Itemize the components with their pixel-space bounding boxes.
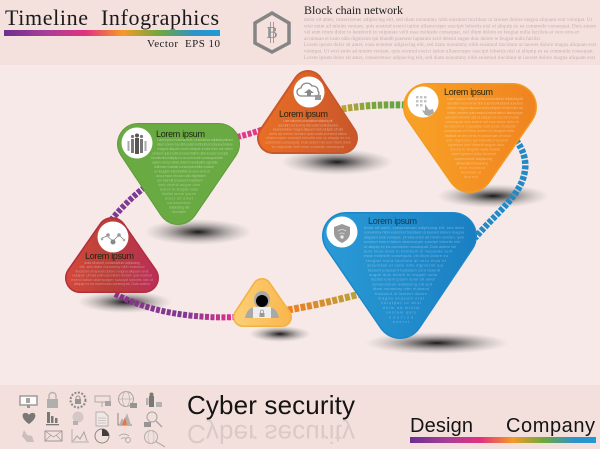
body copy: enim ad minim <box>383 305 420 310</box>
panel: yellow hacker <box>243 288 282 318</box>
icon: heart <box>23 413 35 424</box>
text block: block chain network <box>304 3 597 61</box>
body copy: enim ad minim veniam quis nostrud exerci tation <box>269 131 347 136</box>
body copy <box>151 137 234 214</box>
body copy: dolor sit amet, consectetuer adipiscing elit, sed diam nonummy nibh euismod tincidunt ut laoreet dolore magna aliquam erat volutpat. Ut <box>304 18 593 23</box>
body copy: facilisi lorem ipsum dolor sit amet <box>371 277 436 282</box>
body copy: accumsan et iusto odio dignissim qui blandit praesent luptatum zzril delenit augue duis dolore te feugait nulla facilisi. <box>304 37 541 42</box>
icon: shield wifi <box>326 216 358 248</box>
body copy: consequat vel illum dolore eu feugiat nulla <box>444 128 515 133</box>
icon: keypad touch <box>408 86 438 118</box>
body copy: exerci tation ullamcorper suscipit lobortis nisl ut <box>71 277 154 282</box>
body copy: nostrud <box>389 314 413 319</box>
body copy: tincidunt ut laoreet dolore <box>375 291 428 296</box>
body copy: commodo consequat. Duis autem vel eum iriure dolor <box>265 140 352 144</box>
body copy <box>304 18 597 61</box>
body copy: tincidunt ut <box>461 170 482 175</box>
brand block <box>410 415 596 443</box>
body copy: feugiat nulla facilisis at vero eros et <box>366 258 447 263</box>
connector: yellow to blue <box>288 294 360 310</box>
body copy: esse molestie consequat, vel illum dolore eu <box>364 253 448 258</box>
body copy: luptatum zzril delenit augue duis <box>448 142 504 147</box>
heading: cyber security: Cyber security <box>187 390 355 420</box>
body copy: consectetuer adipiscing elit sed <box>372 281 432 286</box>
heading: Lorem ipsum <box>279 109 328 119</box>
body copy: volutpat ut wisi <box>381 300 421 305</box>
panel: blue <box>326 216 465 324</box>
body copy: Lorem ipsum dolor sit amet, cons ectetuer adipiscing elit, sed diam nonummy nibh euismod tincidunt ut laoreet dolore magna aliquam erat <box>304 43 597 48</box>
icon: globe search <box>144 430 165 447</box>
panel: red <box>71 222 154 286</box>
icon: line graph <box>72 429 89 442</box>
icon: document <box>96 412 108 426</box>
body copy: facilisis at vero eros et accumsan et iusto <box>445 133 512 138</box>
body copy: dolore te feugait nulla facilisi <box>450 147 500 152</box>
rainbow bar <box>4 30 220 36</box>
body copy: lorem ipsum dolor sit amet <box>452 151 497 156</box>
body copy: dolor sit amet, consectetuer adipiscing elit, sed diam <box>364 225 465 230</box>
body copy: minim veniam quis nostrud exerci tation ullamcorper <box>447 110 524 115</box>
body copy: magna aliquam erat volutpat ut wisi enim ad minim <box>157 146 234 151</box>
header band <box>0 0 600 65</box>
body copy: sed diam nonummy nibh euismod tincidunt ut laoreet <box>447 101 524 106</box>
body copy: dolor sit amet <box>165 196 194 200</box>
shadow: dark orange <box>281 149 393 175</box>
icon: envelope <box>45 431 62 441</box>
body copy: lobortis nisl ut aliquip ex ea commodo consequat duis <box>151 155 223 160</box>
body copy: ut aliquip ex ea commodo consequat. Duis autem vel <box>364 244 456 249</box>
shadow: red <box>78 291 172 313</box>
body copy: volutpat. Ut wisi enim ad minim veniam quis nostrud <box>72 273 152 278</box>
body copy: vel eum iriure dolor in hendrerit in vulputate velit esse molestie consequat, vel illum dolore eu feugiat nulla facilisis at vero eros et <box>304 31 580 36</box>
body copy: consequat duis autem vel eum iriure dolor in <box>445 119 519 124</box>
body copy: autem vel eum iriure dolor in hendrerit in vulputate <box>152 160 219 164</box>
body copy: nibh euismod <box>459 165 485 170</box>
icon: cloud upload <box>294 76 324 108</box>
brand: design: Design <box>410 415 473 437</box>
icon: monitor <box>20 396 37 408</box>
icon: area chart <box>118 413 132 425</box>
icon: gear lock <box>70 392 86 408</box>
icon: people lock <box>146 392 162 407</box>
footer band <box>0 385 600 449</box>
panel: orange <box>408 86 524 179</box>
body copy: laoreet <box>464 174 479 179</box>
connector: orange to blue <box>475 140 525 238</box>
body copy: blandit praesent luptatum zzril delenit <box>368 267 441 272</box>
body copy: dolor sit amet, consectetuer adipiscing <box>84 260 140 265</box>
body copy: adipiscing elit <box>169 204 190 210</box>
body copy: exerci <box>393 319 409 324</box>
body copy: eum iriure dolor in hendrerit in vulputate velit <box>364 248 453 254</box>
body copy: tincidunt ut laoreet dolore magna aliquam erat <box>76 268 149 273</box>
icon: map pin lock <box>72 412 84 425</box>
icon grid <box>20 392 165 447</box>
icon: network <box>98 222 128 252</box>
icon: magnifier lock <box>144 412 162 427</box>
body copy <box>71 260 154 286</box>
body copy: nonummy nibh euismod tincidunt ut laoreet dolore magna <box>364 230 465 235</box>
body copy: elit sed diam nonummy <box>456 160 488 165</box>
title: Timeline Infographics <box>5 5 219 30</box>
heading: Block chain network <box>304 3 403 17</box>
body copy: laoreet dolore magna aliquam erat volutpat. Ut wisi <box>273 127 343 132</box>
body copy: dolore te feugait nulla <box>160 186 199 192</box>
title block <box>4 5 220 50</box>
icon: hand touch <box>22 430 34 442</box>
body copy: qui blandit praesent luptatum <box>157 178 204 182</box>
body copy: hendrerit in vulputate velit esse molestie <box>444 124 517 129</box>
body copy: aliquip ex ea commodo consequat. Duis autem <box>74 281 151 286</box>
icon: hexagon currency <box>255 13 289 52</box>
body copy: diam nonummy nibh euismod <box>373 286 429 291</box>
body copy: Lorem ipsum dolor sit amet, consectetuer adipiscing elit, sed diam nonummy nibh euismod tincidunt ut laoreet dolore magna aliquam erat <box>304 56 596 61</box>
body copy: suscipit lobortis nisl ut aliquip ex ea commodo <box>445 114 520 119</box>
icon: globe lock <box>118 392 137 408</box>
body copy: consectetuer adipiscing <box>454 156 492 161</box>
shadow: orange <box>437 184 549 208</box>
body copy: Lorem ipsum dolor sit amet, consectetuer adipiscing elit sed <box>157 137 233 142</box>
body copy: augue duis dolore te feugait nulla <box>369 272 438 277</box>
connector: dark orange to orange <box>342 105 405 109</box>
icon: screen lock <box>95 396 111 407</box>
body copy: facilisi lorem ipsum <box>162 191 197 196</box>
body copy: Lorem ipsum dolor sit amet, consectetuer adipiscing elit <box>447 96 524 101</box>
icon: wifi <box>119 434 130 442</box>
body copy: consectetuer <box>167 200 192 205</box>
body copy <box>265 118 352 149</box>
body copy: diam nonummy nibh euismod tincidunt ut laoreet dolore <box>157 142 234 146</box>
panel: dark orange <box>265 76 352 149</box>
connector: green to dark orange <box>237 129 264 137</box>
body copy: eu feugiat nulla facilisis at vero eros et <box>154 168 211 174</box>
icon: people <box>122 128 152 158</box>
heading reflection: Cyber security <box>187 419 355 449</box>
body copy: accumsan et iusto odio dignissim <box>156 173 207 178</box>
shadow: blue <box>365 332 509 354</box>
body copy: wisi enim ad minim veniam, quis nostrud exerci tation ullamcorper suscipit lobortis nisl ut aliquip ex ea commodo consequat. Duis autem <box>304 24 596 29</box>
body copy: aliquam erat volutpat. Ut wisi enim ad minim veniam, quis <box>364 234 464 239</box>
icon: hooded figure <box>245 291 279 318</box>
body copy: sed diam <box>172 209 187 214</box>
body copy: ullamcorper suscipit lobortis nisl ut aliquip ex ea <box>266 135 351 140</box>
heading: Lorem ipsum <box>85 251 134 261</box>
body copy: sed diam nonummy nibh euismod tincidunt ut <box>278 122 339 127</box>
shadow: yellow <box>249 326 311 342</box>
body copy: odio dignissim qui blandit praesent <box>446 137 509 142</box>
body copy: Lorem sit amet, consectetuer adipiscing elit, <box>283 118 333 123</box>
icon: lock <box>47 393 58 408</box>
panel: green <box>122 128 234 214</box>
body copy <box>364 225 465 324</box>
body copy: nostrud exerci tation ullamcorper suscipit lobortis nisl <box>364 239 460 244</box>
body copy: dolore magna aliquam erat volutpat ut wisi enim ad <box>447 105 523 110</box>
brand: company: Company <box>506 415 595 437</box>
body copy: veniam quis <box>386 310 416 315</box>
subtitle: Vector EPS 10 <box>147 38 220 50</box>
rainbow bar <box>410 437 596 443</box>
body copy: in vulputate velit esse molestie consequat <box>272 144 345 149</box>
body copy: veniam quis nostrud exerci tation ullamcorper suscipit <box>152 150 229 156</box>
body copy: magna aliquam erat <box>378 296 425 300</box>
heading: Lorem ipsum <box>368 216 417 226</box>
connector: green to red <box>112 187 145 219</box>
icon: hexagon currency: B <box>266 23 278 42</box>
icon: pie chart <box>95 429 109 443</box>
heading: Lorem ipsum <box>156 129 205 139</box>
body copy: volutpat. Ut wisi enim ad minim veniam, quis nostrud exerci tation ullamcorper suscipit lobortis nisl ut aliquip ex ea commodo consequat. <box>304 50 594 54</box>
body copy: zzril delenit augue duis <box>158 182 200 187</box>
body copy <box>444 96 524 179</box>
icon: bar chart <box>46 412 59 425</box>
connector: red to yellow <box>115 294 236 317</box>
body copy: velit esse molestie consequat vel illum dolore <box>154 164 215 169</box>
shadow: green <box>144 219 252 245</box>
heading: Lorem ipsum <box>444 87 493 97</box>
body copy: elit, sed diam nonummy nibh euismod <box>80 264 144 269</box>
body copy: accumsan et iusto odio dignissim qui <box>367 263 443 268</box>
